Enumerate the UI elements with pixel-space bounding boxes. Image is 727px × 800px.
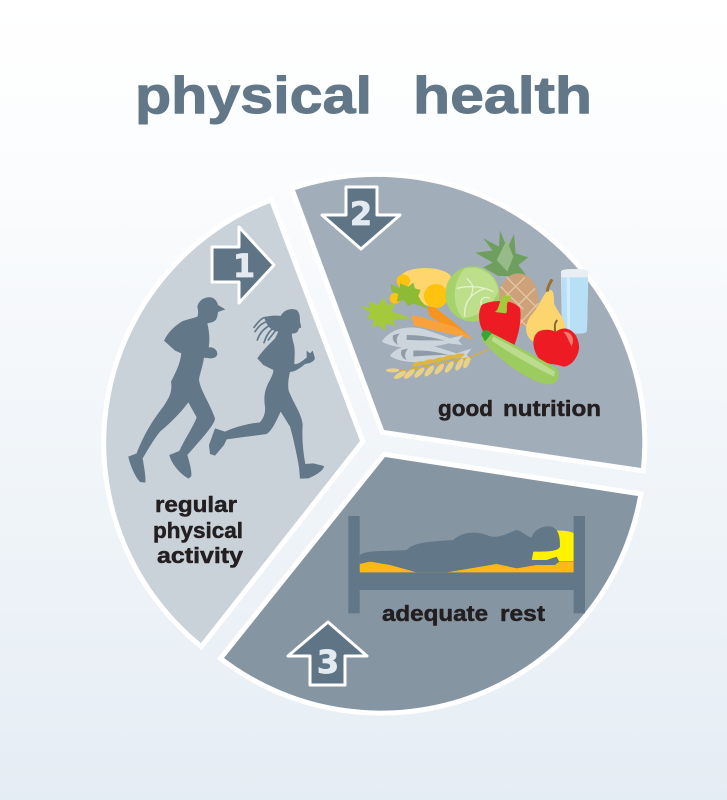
title: physical — [135, 67, 372, 125]
arrow 3 — [288, 622, 367, 685]
label: adequate rest: adequate — [382, 601, 488, 626]
title — [135, 67, 592, 125]
pear — [526, 279, 565, 343]
slice 1 — [106, 203, 360, 643]
panel: adequate rest — [224, 457, 638, 711]
zucchini — [481, 330, 559, 384]
label: good nutrition — [438, 396, 601, 421]
arrow 1 — [212, 227, 274, 303]
label: adequate rest — [382, 601, 546, 626]
cabbage — [445, 266, 499, 322]
glass of water — [561, 269, 588, 333]
label: good nutrition: nutrition — [503, 396, 601, 421]
bell pepper — [479, 295, 521, 347]
icon: person sleeping on bed — [348, 516, 585, 613]
arrow 3: 3 — [317, 643, 339, 681]
fish — [382, 327, 472, 362]
wheat — [386, 349, 488, 381]
label: good nutrition: good — [438, 396, 493, 421]
label: regular physical activity: physical — [153, 518, 243, 543]
label: regular physical activity — [153, 492, 244, 568]
pie chart — [106, 177, 642, 711]
carrots and greens — [360, 283, 473, 339]
label: adequate rest: rest — [500, 601, 546, 626]
label: regular physical activity: regular — [155, 492, 237, 517]
slice 3 — [224, 457, 638, 711]
panel: regular physical activity — [106, 203, 360, 643]
label: regular physical activity: activity — [157, 543, 244, 568]
pineapple — [475, 231, 538, 327]
slice 2 — [295, 177, 642, 468]
squash — [390, 268, 452, 308]
panel: good nutrition — [295, 177, 642, 468]
arrow 2: 2 — [350, 195, 372, 233]
arrow 2 — [322, 187, 400, 249]
icon: food group — [360, 231, 588, 384]
title: health — [413, 67, 592, 125]
icon: male and female runners — [128, 297, 324, 483]
apple — [533, 320, 579, 367]
arrow 1: 1 — [233, 247, 255, 285]
